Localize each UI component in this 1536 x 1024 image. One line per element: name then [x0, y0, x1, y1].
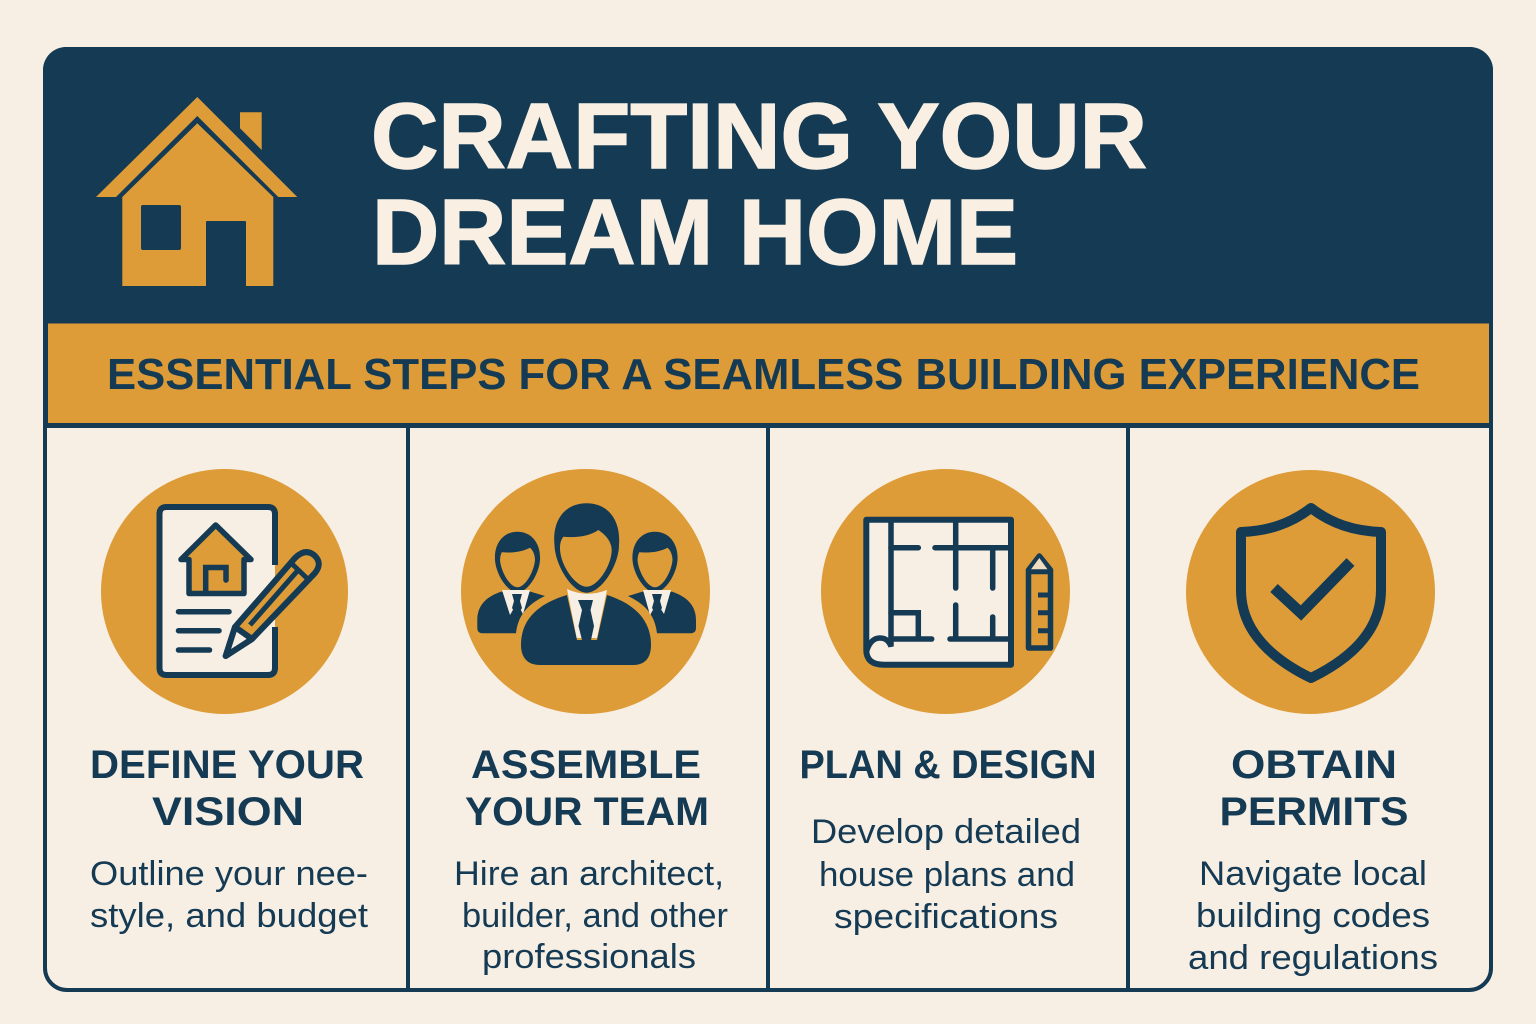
title: CRAFTING YOUR [371, 84, 1147, 188]
heading [1220, 743, 1408, 834]
heading: PLAN & DESIGN [800, 743, 1096, 787]
title [371, 84, 1147, 284]
subtitle banner: ESSENTIAL STEPS FOR A SEAMLESS BUILDING EXPERIENCE [107, 350, 1420, 399]
body text: building codes [1196, 897, 1430, 935]
panel: assemble your team [454, 469, 728, 976]
body text: Outline your nee- [90, 855, 368, 893]
body text: builder, and other [462, 897, 728, 935]
heading [90, 743, 364, 834]
heading: VISION [152, 790, 304, 834]
body text [811, 813, 1081, 936]
heading: ASSEMBLE [471, 743, 701, 787]
body text: house plans and [819, 856, 1075, 894]
panel: define your vision [90, 469, 369, 935]
body text [1188, 855, 1438, 977]
subtitle banner [48, 324, 1489, 423]
heading: PERMITS [1220, 790, 1408, 834]
body text: professionals [482, 938, 696, 976]
icon: team of people [461, 469, 710, 714]
body text: style, and budget [90, 897, 369, 935]
panel: plan and design [800, 469, 1096, 936]
panel: obtain permits [1186, 470, 1438, 977]
heading: YOUR TEAM [465, 790, 709, 834]
body text: and regulations [1188, 939, 1438, 977]
body text: Navigate local [1199, 855, 1427, 893]
icon: blueprint and ruler [821, 469, 1070, 714]
body text [90, 855, 369, 935]
body text: Develop detailed [811, 813, 1081, 851]
heading [465, 743, 709, 834]
icon: house [96, 97, 297, 286]
body text: specifications [834, 898, 1058, 936]
body text: Hire an architect, [454, 855, 724, 893]
heading: DEFINE YOUR [90, 743, 364, 787]
heading: OBTAIN [1231, 743, 1397, 787]
icon: document with house and pencil [101, 469, 348, 714]
title: DREAM HOME [372, 180, 1018, 284]
body text [454, 855, 728, 976]
icon: shield with check [1186, 470, 1435, 714]
header panel [43, 47, 1493, 428]
